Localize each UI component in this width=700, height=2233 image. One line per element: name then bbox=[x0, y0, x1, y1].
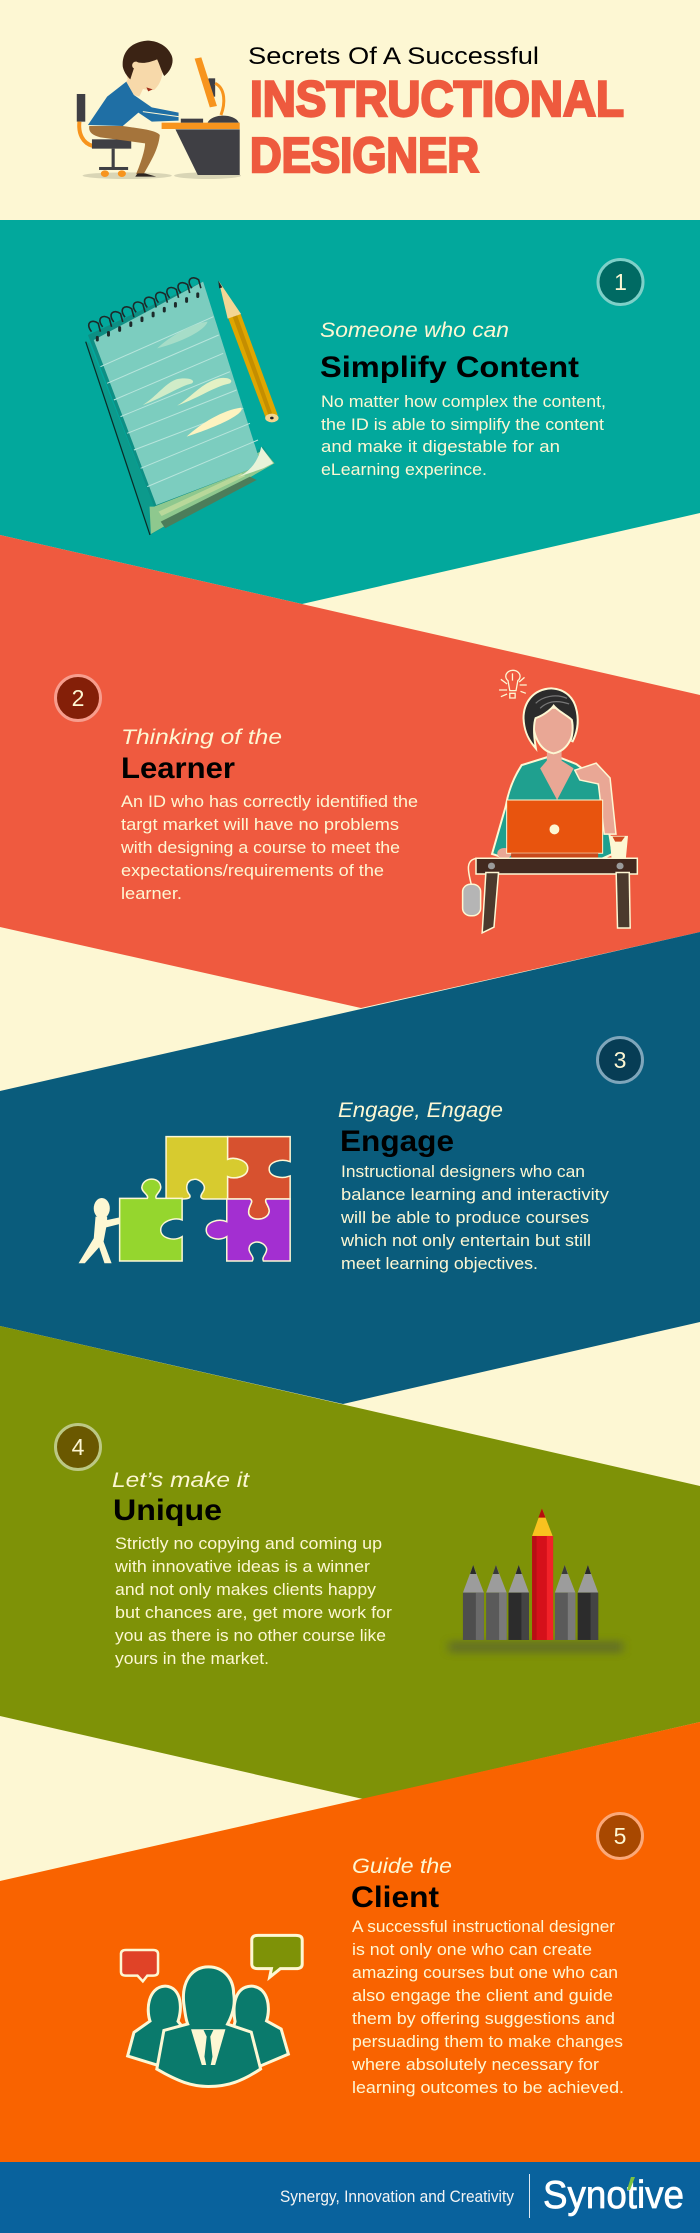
illustration: figure pushing puzzle pieces bbox=[79, 1137, 290, 1263]
panel: engage bbox=[0, 932, 700, 1404]
text: description 5: where absolutely necessary for bbox=[351, 2056, 600, 2074]
footer bbox=[0, 2162, 700, 2233]
text: description 5: persuading them to make changes bbox=[352, 2033, 623, 2051]
heading: Learner: Learner bbox=[121, 752, 235, 785]
step number 4: 4 bbox=[72, 1434, 85, 1460]
text: description 2: expectations/requirements of the bbox=[121, 862, 384, 880]
text: description 2 bbox=[120, 793, 418, 903]
text: description 2: An ID who has correctly identified the bbox=[121, 793, 418, 811]
title: Secrets Of A Successful: Secrets Of A Successful bbox=[248, 43, 539, 70]
text: description 3: balance learning and interactivity bbox=[341, 1186, 610, 1204]
text: Let's make it: Let’s make it bbox=[112, 1469, 250, 1492]
text: description 1: and make it digestable for an bbox=[321, 438, 560, 456]
text: description 3: meet learning objectives. bbox=[341, 1255, 538, 1273]
logo: Synotive: Synotive bbox=[543, 2174, 684, 2217]
text: description 1: the ID is able to simplify the content bbox=[321, 416, 604, 434]
panel: simplify content bbox=[0, 220, 700, 604]
step number 3 bbox=[598, 1038, 642, 1082]
illustration: designer working at desk bbox=[77, 41, 241, 179]
text: description 5 bbox=[351, 1918, 624, 2097]
text: description 3 bbox=[340, 1163, 610, 1273]
step number 1: 1 bbox=[614, 269, 627, 295]
text: Guide the: Guide the bbox=[352, 1855, 452, 1878]
text: description 2: with designing a course to meet the bbox=[120, 839, 400, 857]
illustration: client group with speech bubbles bbox=[121, 1935, 302, 2085]
panel: guide the client bbox=[0, 1722, 700, 2162]
text: description 1: eLearning experince. bbox=[321, 461, 487, 479]
text: description 4: yours in the market. bbox=[115, 1650, 269, 1668]
panel: unique bbox=[0, 1326, 700, 1799]
text: description 4: with innovative ideas is a winner bbox=[114, 1558, 371, 1576]
panel: thinking of the learner bbox=[0, 535, 700, 1008]
heading: Simplify Content: Simplify Content bbox=[320, 351, 579, 384]
text: description 4: but chances are, get more work for bbox=[115, 1604, 393, 1622]
text: description 1: No matter how complex the content, bbox=[321, 393, 606, 411]
step number 4 bbox=[56, 1424, 100, 1470]
heading: Unique: Unique bbox=[113, 1494, 222, 1527]
step number 5 bbox=[598, 1814, 642, 1858]
panel: header bbox=[77, 41, 624, 183]
title: DESIGNER: DESIGNER bbox=[250, 129, 479, 183]
text: description 5: A successful instructional designer bbox=[352, 1918, 616, 1936]
text: Thinking of the: Thinking of the bbox=[121, 726, 282, 749]
text: description 3: will be able to produce courses bbox=[340, 1209, 589, 1227]
text: description 3: which not only entertain but still bbox=[340, 1232, 591, 1250]
text: description 3: Instructional designers who can bbox=[341, 1163, 585, 1181]
text: description 2: learner. bbox=[121, 885, 182, 903]
text: Someone who can: Someone who can bbox=[320, 319, 509, 342]
step number 1 bbox=[598, 260, 643, 304]
text: tagline: Synergy, Innovation and Creativity bbox=[280, 2187, 514, 2206]
step number 3: 3 bbox=[614, 1047, 626, 1073]
step number 2 bbox=[56, 676, 100, 720]
icon: notepad and pencil bbox=[86, 278, 279, 535]
step number 5: 5 bbox=[614, 1823, 626, 1849]
text: description 5: also engage the client and guide bbox=[352, 1987, 613, 2005]
text: description 5: them by offering suggestions and bbox=[352, 2010, 615, 2028]
text: description 4 bbox=[114, 1535, 393, 1668]
text: description 5: is not only one who can create bbox=[352, 1941, 592, 1959]
text: description 5: learning outcomes to be achieved. bbox=[352, 2079, 624, 2097]
illustration: woman with laptop at table bbox=[463, 670, 637, 932]
text: description 5: amazing courses but one who can bbox=[352, 1964, 618, 1982]
text: description 1 bbox=[321, 393, 606, 479]
text: description 4: you as there is no other course like bbox=[115, 1627, 386, 1645]
heading: Engage: Engage bbox=[340, 1125, 454, 1158]
text: description 2: targt market will have no problems bbox=[121, 816, 399, 834]
text: Engage, Engage: Engage, Engage bbox=[338, 1099, 503, 1122]
title: INSTRUCTIONAL: INSTRUCTIONAL bbox=[250, 71, 624, 127]
heading: Client: Client bbox=[351, 1881, 439, 1914]
illustration: red pencil among grey pencils bbox=[449, 1508, 623, 1653]
text: description 4: and not only makes clients happy bbox=[115, 1581, 377, 1599]
step number 2: 2 bbox=[72, 685, 84, 711]
text: description 4: Strictly no copying and coming up bbox=[115, 1535, 382, 1553]
